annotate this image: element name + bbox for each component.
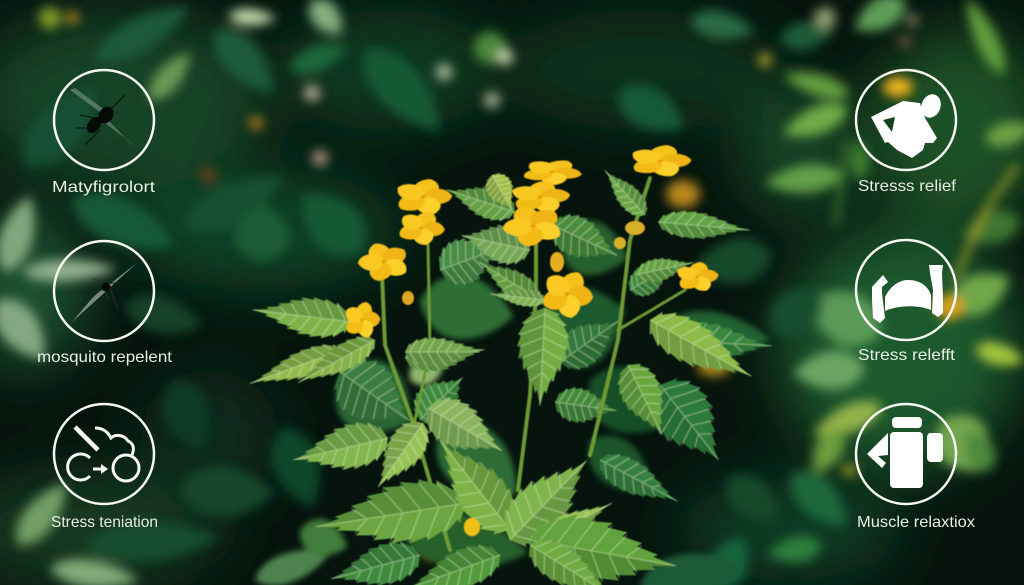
icon: fly in circle [54,70,154,170]
panel: left benefit column [37,70,173,531]
icon: mosquito in circle [54,241,154,341]
label: Muscle relaxtiox: Muscle relaxtiox [857,514,975,531]
icon: muscle relaxation in circle [856,404,956,504]
plant: central herb with yellow flowers [245,140,773,585]
plant: bright leaves [245,162,762,585]
label: Matyfigrolort: Matyfigrolort [52,179,156,196]
plant: soft rear foliage mass [250,213,772,585]
icon: person stress relief in circle [856,70,956,170]
label: Stresss relief: Stresss relief [858,178,957,195]
label: Stress teniation: Stress teniation [51,514,158,531]
plant: shaded rear leaves [322,206,773,585]
panel: right benefit column [856,70,975,531]
icon: raised arms relief in circle [856,240,956,340]
plant: yellow flowers [336,140,725,536]
label: Stress relefft: Stress relefft [858,347,956,364]
label: mosquito repelent: mosquito repelent [37,349,173,366]
icon: stress tension symbol in circle [54,404,154,504]
plant: stems [382,178,685,550]
